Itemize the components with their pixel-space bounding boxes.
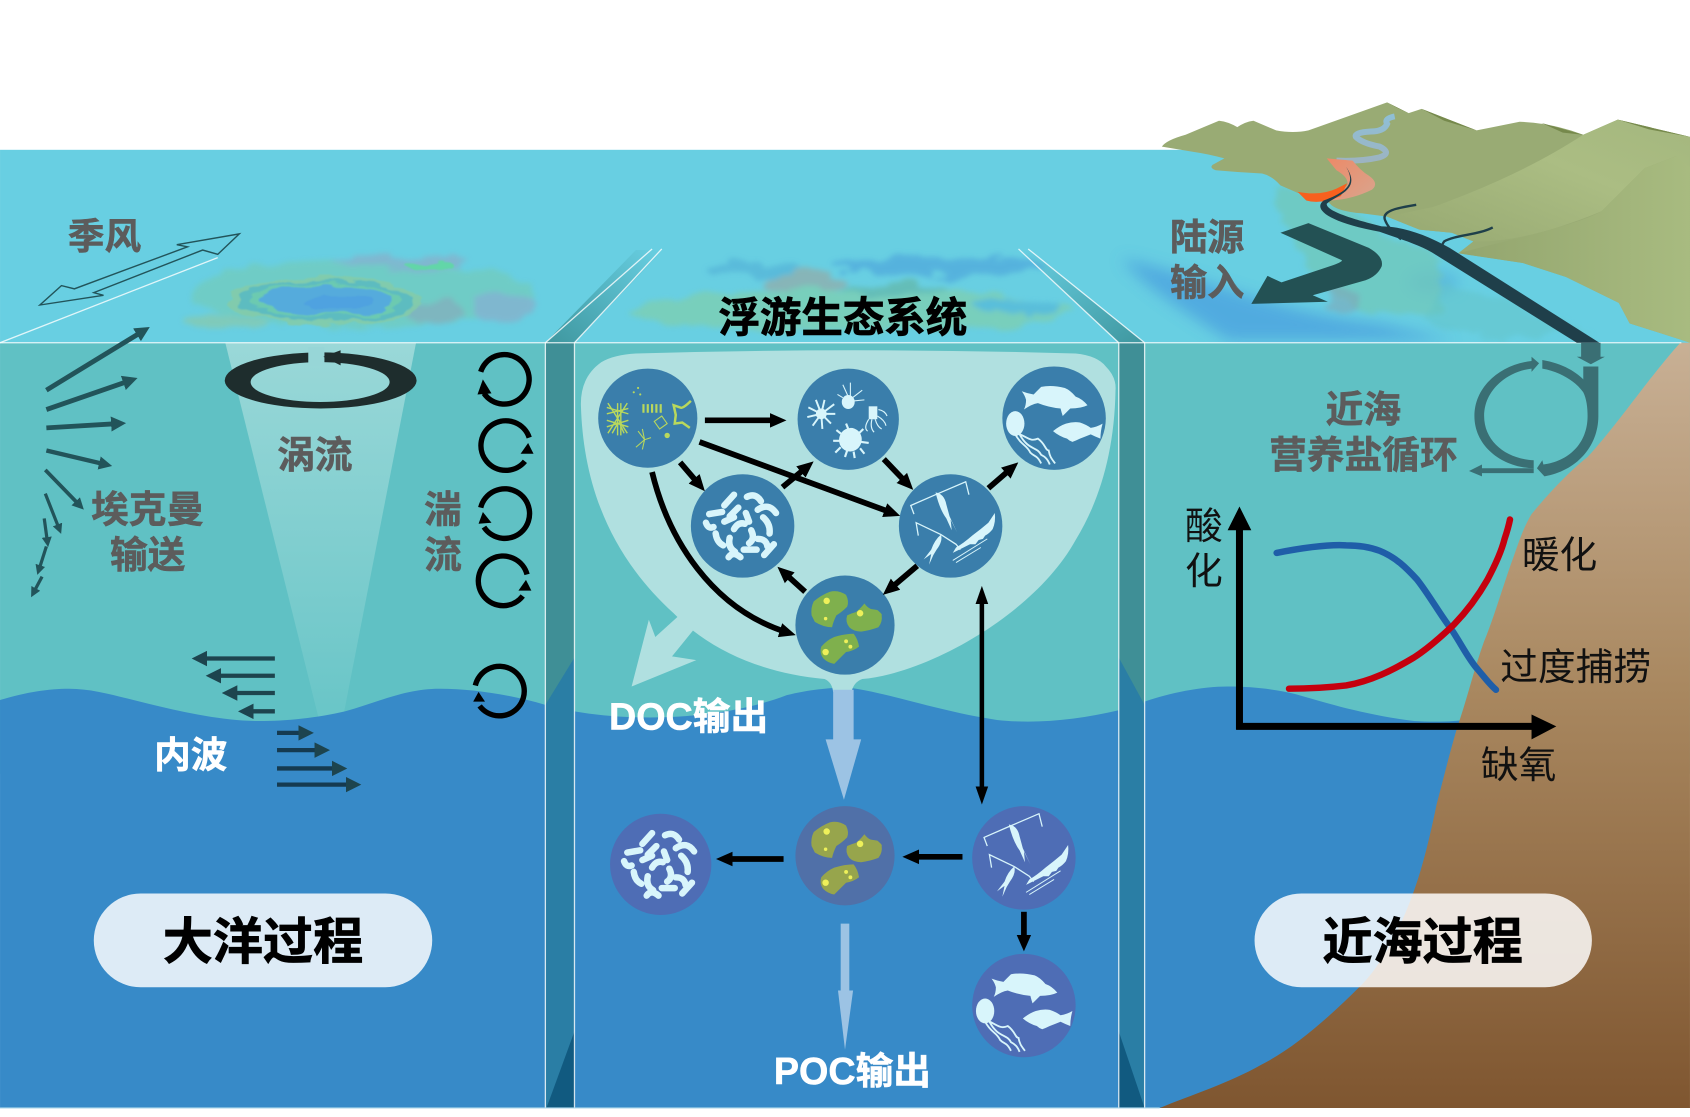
arrows: Ekman transport xyxy=(33,331,143,593)
circle: mesozooplankton xyxy=(899,474,1002,578)
icon: copepods and krill xyxy=(911,482,995,565)
icon: deep detritus xyxy=(811,822,882,895)
circle: deep zooplankton xyxy=(972,806,1076,910)
label: terrestrial input: 输入 xyxy=(1170,261,1244,303)
panel: side channel deep right xyxy=(1119,657,1145,1108)
arc: right half of cycle xyxy=(1542,360,1592,392)
circle: bacteria xyxy=(691,474,794,578)
label pill: ocean processes xyxy=(94,893,432,987)
label: Ekman transport: 输送 xyxy=(110,534,186,576)
panel: side channel deep left xyxy=(545,657,574,1108)
arrow: vertical migration double arrow xyxy=(980,595,984,795)
label: coastal nutrient cycle: 营养盐循环 xyxy=(1269,434,1458,476)
arrows: food web links xyxy=(652,420,1012,633)
river: channel into the ocean xyxy=(1320,167,1599,343)
circle: detritus xyxy=(795,576,895,675)
icon: detritus particles xyxy=(811,591,882,664)
arrow: inflow from river xyxy=(1577,343,1605,364)
icon: bacteria xyxy=(706,495,776,557)
land: shaded summits xyxy=(1387,102,1690,137)
land: lower mountain xyxy=(1458,156,1690,343)
panel: teal upper water column xyxy=(0,343,1690,774)
icon: deep bacteria xyxy=(624,833,694,896)
river: orange mouth xyxy=(1298,183,1347,202)
icon: deep copepods and krill xyxy=(984,814,1068,897)
icon: deep fish and jellyfish xyxy=(976,973,1072,1052)
heading: plankton ecosystem: 浮游生态系统 xyxy=(718,294,967,341)
axis labels: 暖化 xyxy=(1522,534,1597,576)
panel: blue deep water xyxy=(0,687,1477,1108)
chart axes xyxy=(1236,524,1535,730)
icon: eddy ring xyxy=(225,347,417,408)
river: upstream with red estuary xyxy=(1298,116,1395,202)
chart: coastal stressors xyxy=(1185,505,1651,786)
label: turbulence xyxy=(424,489,462,576)
panel: sea surface top plane xyxy=(0,150,1690,343)
river: red estuary plume xyxy=(1327,158,1375,200)
arrows: internal waves xyxy=(199,659,354,785)
label: Ekman transport: 埃克曼 xyxy=(91,489,204,531)
label: terrestrial input xyxy=(1170,216,1244,303)
label pill: ocean processes: 大洋过程 xyxy=(163,914,363,970)
coast: seabed slope xyxy=(1160,343,1690,1108)
panel: plankton bowl xyxy=(581,350,1116,692)
arc: left half of cycle xyxy=(1474,357,1539,468)
icon: phytoplankton species xyxy=(607,387,691,449)
land: green mountains xyxy=(1162,102,1690,343)
label: coastal nutrient cycle xyxy=(1269,388,1458,476)
axis labels: 酸 xyxy=(1185,505,1223,547)
label: terrestrial input: 陆源 xyxy=(1170,216,1244,258)
circle: deep detritus xyxy=(795,806,895,905)
arrow: DOC export xyxy=(632,616,696,687)
curve: warming xyxy=(1289,519,1510,689)
satellite texture: coastal plume xyxy=(1121,185,1595,341)
label: turbulence: 湍 xyxy=(424,489,462,531)
axis labels: 缺氧 xyxy=(1481,744,1556,786)
panel: eddy light cone xyxy=(225,343,416,724)
arrow: outflow tail xyxy=(1469,465,1534,476)
arrows: deep food web links xyxy=(724,857,1024,943)
curve: overfishing xyxy=(1277,545,1496,690)
label: monsoon: 季风 xyxy=(68,216,142,257)
circle: deep bacteria xyxy=(610,814,711,915)
arrow: terrestrial input xyxy=(1251,223,1382,304)
land: lit ridge xyxy=(1387,120,1690,241)
land: base terrain xyxy=(1162,102,1690,343)
circle: deep fish xyxy=(972,954,1076,1057)
label: Ekman transport xyxy=(91,489,204,576)
label pill: coastal processes xyxy=(1255,893,1592,987)
label: eddy: 涡流 xyxy=(277,434,352,476)
icon: microzooplankton species xyxy=(807,383,887,458)
axis labels: 化 xyxy=(1185,550,1223,592)
label: turbulence: 流 xyxy=(424,534,462,576)
arrow: POC export xyxy=(838,924,853,1050)
label pill: coastal processes: 近海过程 xyxy=(1322,914,1523,970)
icons: turbulence rings xyxy=(473,355,534,716)
panel frame lines xyxy=(0,249,1681,1108)
circle: microzooplankton xyxy=(798,369,899,470)
circle: fish and jellyfish xyxy=(1002,366,1106,470)
satellite texture: central ocean xyxy=(631,257,1072,332)
arrow: sinking flux xyxy=(826,690,861,800)
label: internal waves: 内波 xyxy=(154,734,227,775)
axis labels xyxy=(1185,505,1651,786)
icon: fish and jellyfish xyxy=(1006,386,1103,465)
axis labels: 过度捕捞 xyxy=(1500,646,1651,688)
arrow: monsoon double arrow xyxy=(40,234,239,305)
panel: side channels upper xyxy=(545,343,1145,774)
river: pale blue upstream xyxy=(1336,116,1395,161)
label: coastal nutrient cycle: 近海 xyxy=(1326,388,1401,430)
satellite texture: ocean eddy xyxy=(183,255,535,328)
label: DOC export: DOC输出 xyxy=(609,696,768,738)
label: POC export: POC输出 xyxy=(774,1050,931,1092)
circle: phytoplankton xyxy=(598,369,697,468)
icon: nutrient cycle arrows xyxy=(1469,343,1605,476)
